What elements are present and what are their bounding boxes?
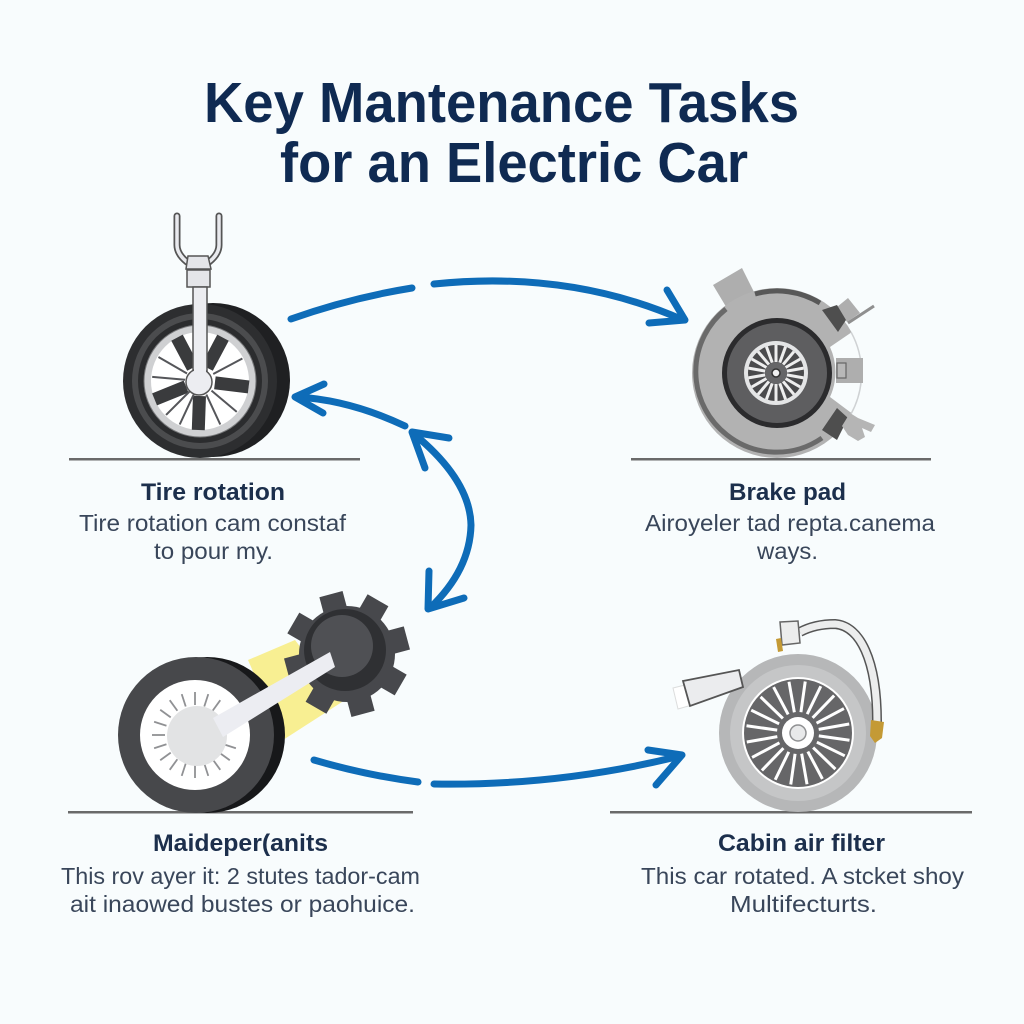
- icon: wheel with fork: [123, 216, 290, 458]
- panel: cabin air filter: [610, 621, 972, 917]
- description: tire rotation: [79, 510, 347, 564]
- label: brake pad: Brake pad: [729, 479, 846, 506]
- ground line: maintenance parts: [68, 811, 413, 814]
- label: tire rotation: Tire rotation: [141, 479, 285, 506]
- arrow: into tire rotation: [295, 384, 405, 426]
- label: cabin air filter: Cabin air filter: [718, 830, 885, 857]
- description: maintenance parts: This rov ayer it: 2 stutes tador-cam: [61, 863, 420, 889]
- description: cabin air filter: This car rotated. A stcket shoy: [641, 863, 965, 889]
- icon: wheel arm and gear: [118, 591, 410, 813]
- description: tire rotation: Tire rotation cam constaf: [79, 510, 347, 536]
- description: brake pad: [645, 510, 935, 564]
- panel: brake pad: [631, 268, 935, 564]
- description: cabin air filter: [641, 863, 965, 917]
- title: Key Mantenance Tasks: [204, 71, 799, 135]
- ground line: cabin air filter: [610, 811, 972, 814]
- ground line: tire rotation: [69, 458, 360, 460]
- description: brake pad: Airoyeler tad repta.canema: [645, 510, 935, 536]
- description: tire rotation: to pour my.: [154, 538, 273, 564]
- arrow: top, tire rotation to brake pad: [291, 281, 685, 323]
- panel: tire rotation: [69, 216, 360, 564]
- title: for an Electric Car: [280, 131, 748, 195]
- arrow: bottom, parts to cabin air filter: [314, 750, 682, 785]
- icon: wheel with hose and filter: [673, 621, 884, 812]
- arrow: vertical double-headed curve: [412, 432, 471, 609]
- panel: maintenance parts: [61, 591, 420, 917]
- description: brake pad: ways.: [756, 538, 818, 564]
- ground line: brake pad: [631, 458, 931, 460]
- description: maintenance parts: [61, 863, 420, 917]
- icon: brake assembly: [692, 268, 880, 458]
- description: maintenance parts: ait inaowed bustes or paohuice.: [70, 891, 415, 917]
- title: [204, 71, 799, 195]
- description: cabin air filter: Multifecturts.: [730, 891, 877, 917]
- label: maintenance parts: Maideper(anits: [153, 830, 328, 857]
